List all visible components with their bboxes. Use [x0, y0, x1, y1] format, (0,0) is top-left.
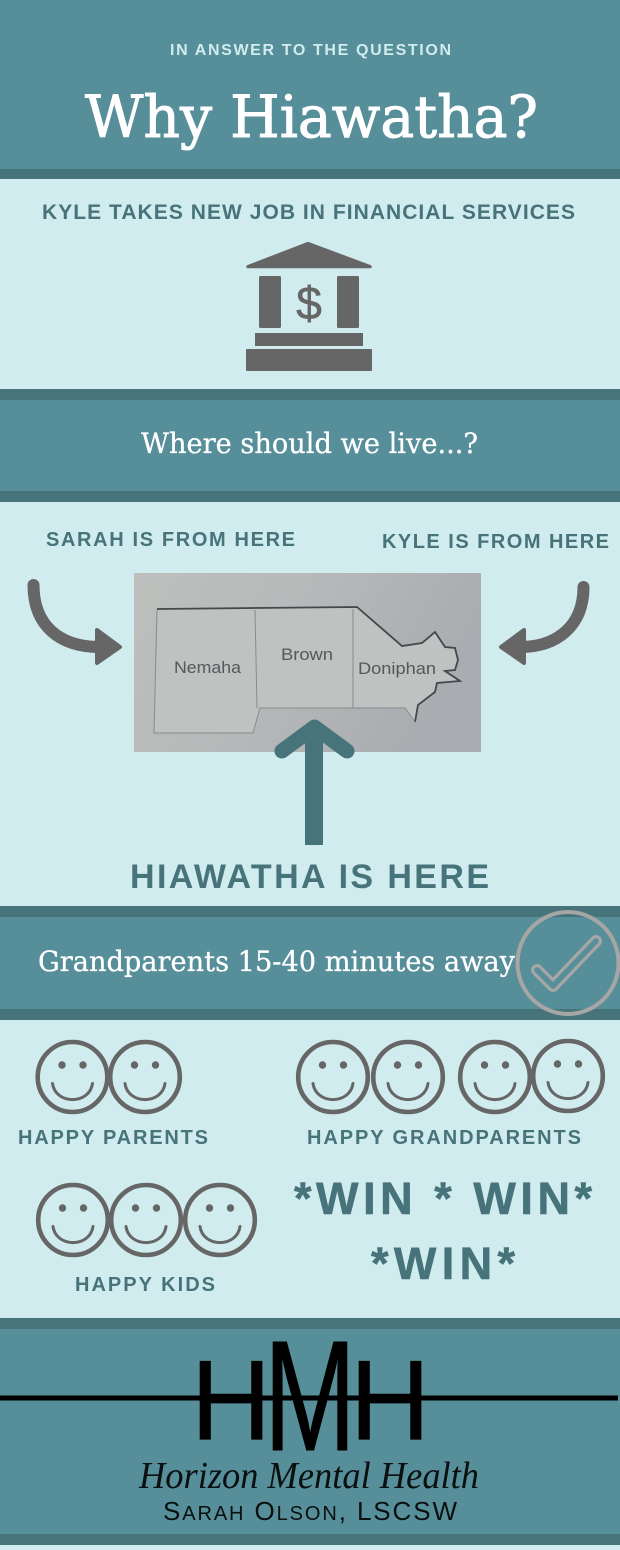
icon: bank — [246, 242, 372, 371]
county labels: Doniphan — [358, 659, 436, 678]
icon: bank: $ — [296, 277, 322, 329]
panel: title banner — [0, 0, 620, 179]
panel: grandparents — [0, 906, 620, 1020]
panel: where should we live — [0, 389, 620, 502]
map photo — [134, 573, 481, 752]
icon: check mark — [518, 912, 618, 1014]
arrow: Kyle curved — [501, 587, 584, 663]
panel: map section — [0, 502, 620, 906]
label: Sarah: SARAH IS FROM HERE — [46, 529, 295, 551]
county labels — [174, 645, 436, 678]
callout: win win: *WIN* — [371, 1238, 515, 1289]
county labels: Nemaha — [174, 658, 242, 677]
panel: footer logo — [0, 1309, 620, 1545]
subtitle: IN ANSWER TO THE QUESTION — [170, 42, 451, 59]
logo: practice name: Horizon Mental Health — [138, 1455, 479, 1497]
callout: win win — [294, 1173, 592, 1289]
logo: clinician name: SARAH OLSON, LSCSW — [163, 1496, 457, 1526]
county labels: Brown — [281, 645, 333, 664]
label: happy kids: HAPPY KIDS — [75, 1274, 215, 1296]
arrow: Sarah curved — [34, 585, 120, 663]
callout: win win: *WIN * WIN* — [294, 1173, 592, 1224]
panel: new job — [0, 179, 620, 389]
county outline — [154, 607, 460, 733]
label: happy parents: HAPPY PARENTS — [18, 1127, 208, 1149]
heading: new job: KYLE TAKES NEW JOB IN FINANCIAL SERVICES — [42, 201, 575, 224]
logo: HMH monogram: M — [264, 1309, 356, 1484]
arrow: up to Hiawatha — [282, 727, 347, 845]
label: Hiawatha: HIAWATHA IS HERE — [130, 858, 489, 896]
panel: happy families — [0, 1020, 620, 1318]
label: Kyle: KYLE IS FROM HERE — [382, 531, 609, 553]
logo: HMH monogram — [0, 1309, 618, 1484]
logo: HMH monogram: H — [191, 1337, 271, 1463]
logo: HMH monogram: H — [350, 1337, 430, 1463]
question text: Where should we live...? — [141, 427, 478, 460]
icons: parents smileys — [38, 1042, 180, 1112]
icons: kids smileys — [38, 1185, 255, 1255]
icons: grandparents smileys — [298, 1041, 603, 1112]
title: Why Hiawatha? — [85, 83, 538, 151]
label: happy grandparents: HAPPY GRANDPARENTS — [307, 1127, 581, 1149]
grandparents text: Grandparents 15-40 minutes away — [38, 945, 515, 978]
